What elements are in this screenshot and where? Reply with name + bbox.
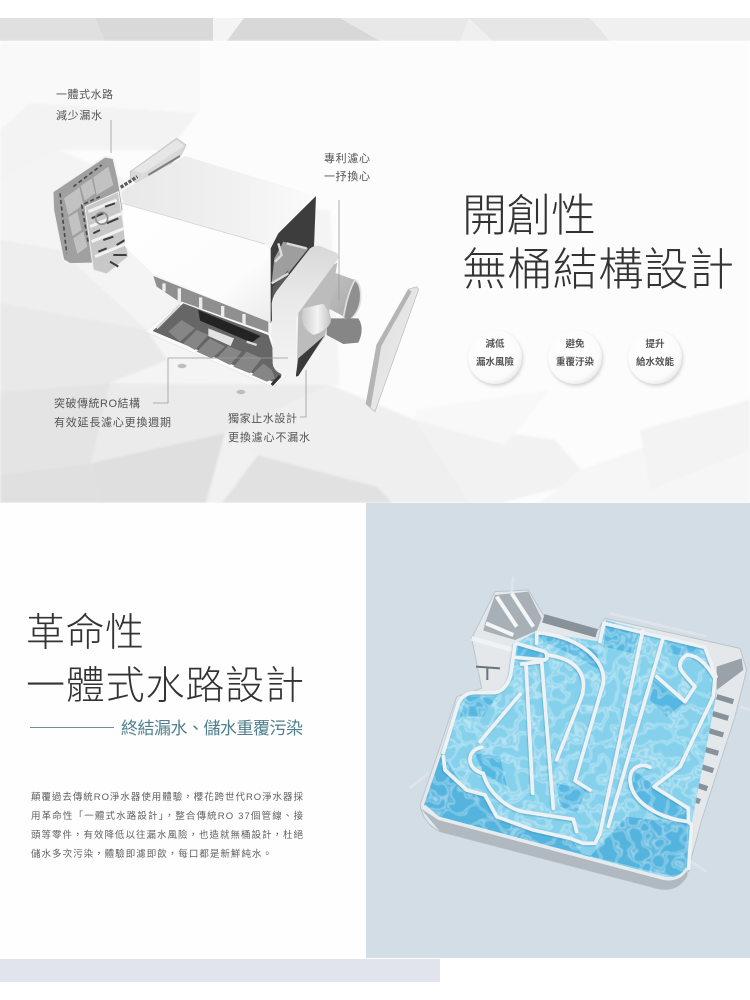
dark slot xyxy=(296,336,324,377)
callout: water-stop design: 獨家止水設計 xyxy=(228,411,297,425)
callout: RO structure: 突破傳統RO結構 xyxy=(54,396,140,410)
badge: lower leak risk xyxy=(468,330,523,386)
callout: water-stop design xyxy=(228,411,310,444)
callout: RO structure: 有效延長濾心更換週期 xyxy=(54,415,171,429)
removable side panel xyxy=(366,287,419,412)
badge: lower leak risk: 漏水風險 xyxy=(476,356,514,368)
plate side wall xyxy=(421,808,687,889)
callout: integrated waterway: 減少漏水 xyxy=(56,108,102,122)
panel: lower blue right xyxy=(366,503,750,958)
heading: pioneering tankless design: 無桶結構設計 xyxy=(462,244,734,295)
badge: lower leak risk: 減低 xyxy=(485,338,505,350)
badge: improve water output xyxy=(628,330,683,386)
rear ribs xyxy=(409,577,750,872)
frame xyxy=(272,246,338,379)
background: low-poly section xyxy=(0,41,750,503)
product: lower bay and tray xyxy=(145,276,285,387)
callout: patented filter: 專利濾心 xyxy=(324,151,370,165)
heading: revolutionary one-piece waterway: 革命性 xyxy=(26,612,144,655)
channel ridges xyxy=(443,623,716,868)
knob xyxy=(301,303,331,335)
top strip band xyxy=(0,18,750,41)
callout: RO structure xyxy=(54,396,171,429)
callout: integrated waterway: 一體式水路 xyxy=(56,88,113,101)
blue water area xyxy=(424,620,716,878)
product: main white housing xyxy=(122,156,316,323)
callout: integrated waterway xyxy=(56,88,113,122)
badge: avoid recontamination: 避免 xyxy=(565,338,585,350)
plate rim xyxy=(424,806,687,879)
callout: patented filter: 一抒換心 xyxy=(324,169,370,183)
plate outer shell xyxy=(420,590,747,889)
subheading with rule: 終結漏水、儲水重覆污染 xyxy=(121,719,303,738)
body paragraph: 顛覆過去傳統RO淨水器使用體驗，櫻花跨世代RO淨水器採 xyxy=(31,791,303,803)
callout: patented filter xyxy=(324,151,370,183)
heading: pioneering tankless design: 開創性 xyxy=(462,190,596,241)
body paragraph xyxy=(31,791,303,860)
body paragraph: 頭等零件，有效降低以往漏水風險，也造就無桶設計，杜絕 xyxy=(31,829,303,841)
badge: avoid recontamination: 重覆汙染 xyxy=(556,356,594,368)
product: left water-circuit plate xyxy=(53,157,128,274)
panel: lower white left xyxy=(0,503,366,959)
badge: improve water output: 給水效能 xyxy=(636,356,674,368)
product: filter cartridges, control frame and knob xyxy=(272,246,419,412)
callout: water-stop design: 更換濾心不漏水 xyxy=(228,430,310,444)
frame back xyxy=(297,263,337,377)
badge: improve water output: 提升 xyxy=(645,338,665,350)
heading: pioneering tankless design xyxy=(462,190,734,295)
body paragraph: 儲水多次污染，體驗即濾即飲，每口都是新鮮純水。 xyxy=(31,848,272,860)
table marks xyxy=(178,364,246,394)
body paragraph: 用革命性「一體式水路設計」，整合傳統RO 37個管線、接 xyxy=(31,810,303,822)
heading: revolutionary one-piece waterway: 一體式水路設計 xyxy=(26,665,304,708)
heading: revolutionary one-piece waterway xyxy=(26,612,304,708)
illustration: one-piece water channel plate xyxy=(409,577,750,889)
bottom lilac band xyxy=(0,959,440,982)
product: top connector xyxy=(121,138,186,187)
badge: avoid recontamination xyxy=(548,330,603,386)
lower cartridge xyxy=(327,318,362,344)
leader lines xyxy=(111,120,339,417)
upper cartridge xyxy=(313,272,361,320)
